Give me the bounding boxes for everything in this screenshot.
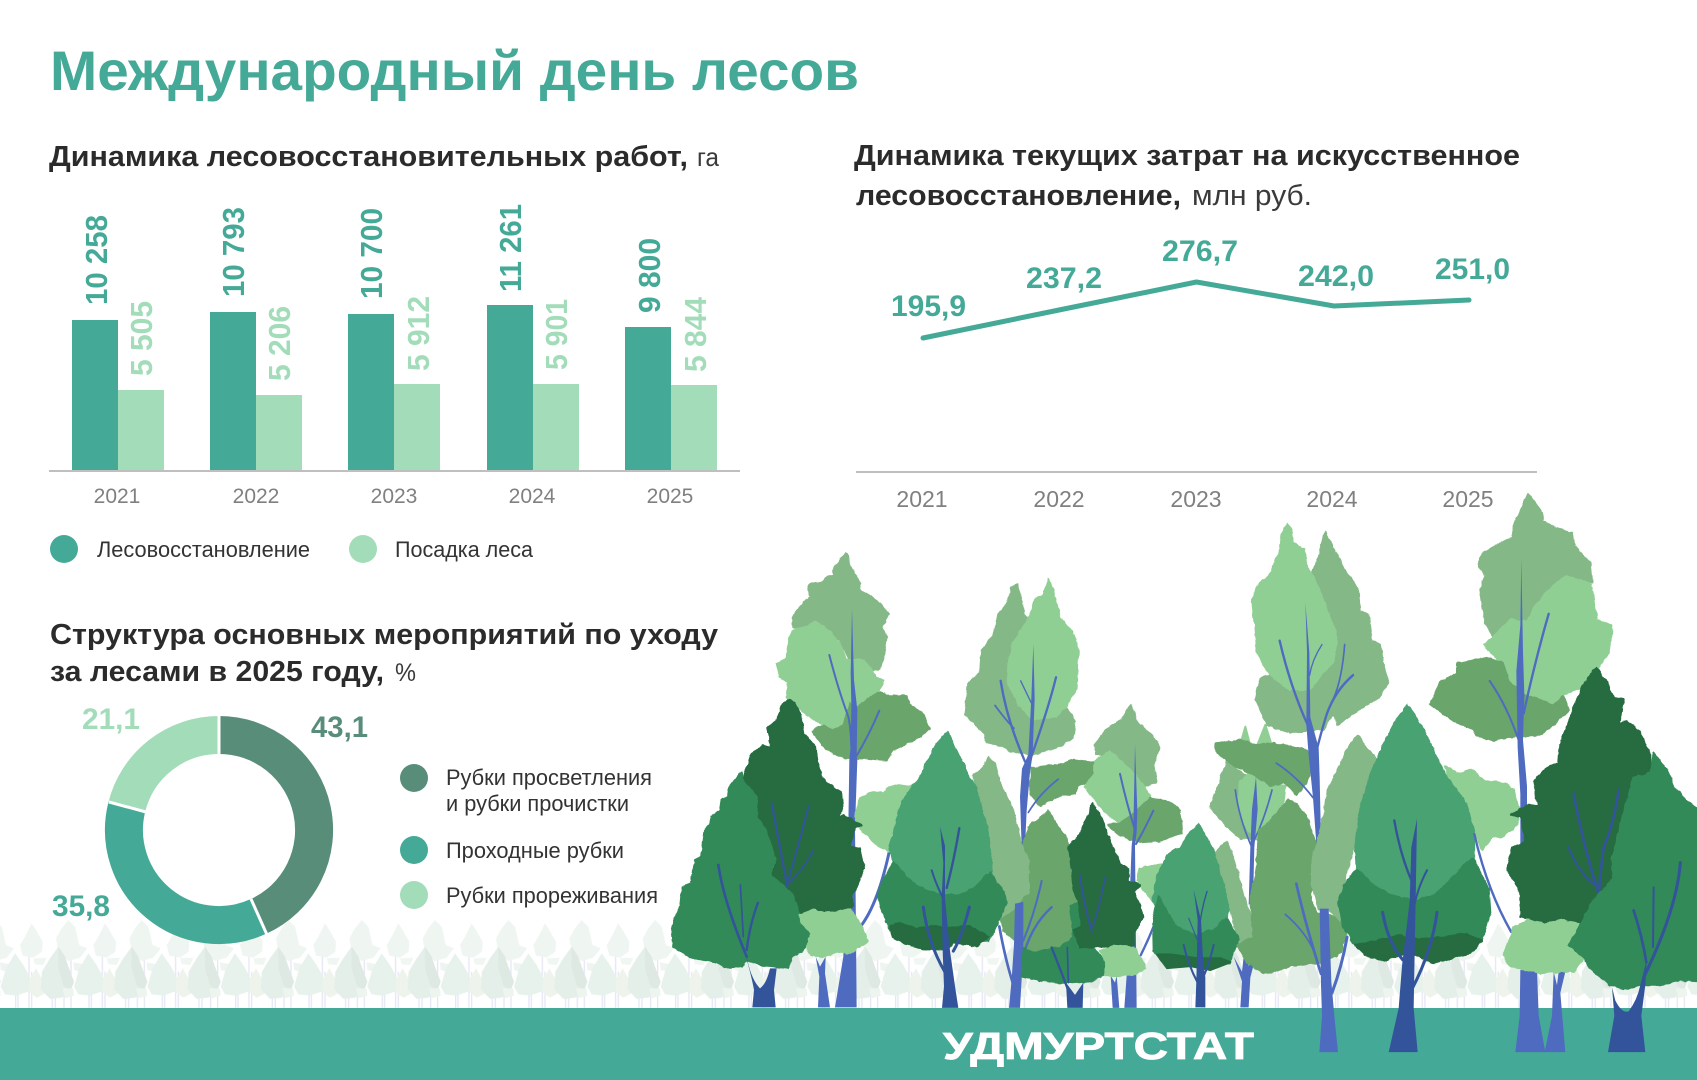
tree: tall birch right bbox=[1430, 493, 1612, 1052]
bar legend bbox=[50, 535, 534, 563]
trunk: centre tree bbox=[999, 881, 1052, 1008]
footer label: УДМУРТСТАТ bbox=[943, 1026, 1254, 1068]
bar values: 10 258 bbox=[79, 215, 114, 305]
bar axis years: 2022 bbox=[233, 485, 279, 508]
line values: 237,2 bbox=[1026, 262, 1102, 295]
leaf: light right bbox=[1445, 767, 1519, 849]
tree: small birch right bbox=[1210, 725, 1310, 1007]
bar legend: Лесовосстановление bbox=[97, 537, 310, 562]
trunk: olive tree bbox=[1285, 884, 1347, 1052]
illustration: left trees bbox=[672, 553, 929, 1007]
bar values: 5 206 bbox=[262, 306, 297, 381]
donut legend bbox=[400, 764, 658, 909]
tree: small dark bbox=[1022, 804, 1145, 1008]
tree: pale crown bbox=[1312, 736, 1379, 920]
line axis years: 2025 bbox=[1442, 486, 1494, 512]
bar axis years: 2023 bbox=[371, 485, 417, 508]
heading: costs: лесовосстановление, bbox=[856, 180, 1181, 212]
heading: structure: за лесами в 2025 году, bbox=[50, 656, 384, 688]
leaf: light crown bbox=[855, 783, 917, 852]
donut values: 21,1 bbox=[82, 703, 140, 736]
bar values: 5 844 bbox=[678, 296, 713, 372]
bar axis years: 2025 bbox=[647, 485, 693, 508]
tree: dark right bbox=[1507, 668, 1650, 924]
bar values: 5 901 bbox=[539, 299, 574, 370]
tree: narrow pale left bbox=[1215, 842, 1254, 945]
panel: reforestation bar chart bbox=[49, 141, 740, 563]
line axis years: 2024 bbox=[1306, 486, 1358, 512]
line values: 276,7 bbox=[1162, 235, 1238, 268]
bar axis years: 2021 bbox=[94, 485, 140, 508]
illustration: right trees bbox=[1153, 493, 1697, 1052]
tree: narrow pale bbox=[973, 758, 1028, 918]
line axis years: 2022 bbox=[1033, 486, 1085, 512]
heading: structure: Структура основных мероприятий по уходу bbox=[50, 619, 718, 651]
bar values: 10 700 bbox=[354, 208, 389, 299]
donut values: 35,8 bbox=[52, 890, 110, 923]
tree: tall birch bbox=[777, 553, 929, 1007]
background forest bbox=[0, 905, 1697, 1008]
bar axis years bbox=[94, 485, 693, 508]
tree: small teal bbox=[1153, 824, 1239, 1007]
bar axis years: 2024 bbox=[509, 485, 556, 508]
line values: 251,0 bbox=[1435, 253, 1510, 286]
donut legend: Рубки прореживания bbox=[446, 883, 658, 908]
line axis years: 2023 bbox=[1170, 486, 1222, 512]
tree: teal centre bbox=[878, 732, 1007, 1008]
panel: donut chart bbox=[50, 619, 718, 937]
illustration: centre trees bbox=[878, 579, 1182, 1008]
heading: reforestation: га bbox=[697, 142, 720, 172]
donut legend: и рубки прочистки bbox=[446, 791, 629, 816]
bar legend: Посадка леса bbox=[395, 537, 534, 562]
heading: costs: Динамика текущих затрат на искусственное bbox=[854, 140, 1520, 172]
footer band bbox=[0, 1008, 1697, 1080]
bar values bbox=[79, 204, 713, 381]
bar values: 9 800 bbox=[632, 238, 667, 313]
line values: 195,9 bbox=[891, 290, 966, 323]
donut bbox=[109, 715, 314, 937]
bar values: 10 793 bbox=[216, 207, 251, 297]
tree: birch centre bbox=[965, 579, 1110, 848]
heading: structure: % bbox=[395, 659, 416, 687]
line values: 242,0 bbox=[1298, 260, 1374, 293]
bar values: 11 261 bbox=[493, 204, 528, 292]
tree: large birch bbox=[1252, 524, 1389, 844]
donut values bbox=[52, 703, 368, 923]
heading: structure bbox=[50, 619, 718, 688]
line values bbox=[891, 235, 1510, 323]
tree: small birch bbox=[1085, 705, 1182, 1008]
tree: teal right bbox=[1339, 706, 1490, 1052]
cost line bbox=[923, 282, 1469, 338]
bars bbox=[49, 305, 740, 472]
panel: cost line chart bbox=[854, 140, 1537, 512]
donut legend: Рубки просветления bbox=[446, 765, 652, 790]
heading: costs: млн руб. bbox=[1192, 180, 1312, 212]
bar values: 5 505 bbox=[124, 301, 159, 376]
tree: mid green right bbox=[1569, 754, 1697, 1052]
bar values: 5 912 bbox=[401, 296, 436, 371]
tree: olive green bbox=[1000, 811, 1085, 953]
leaf: light lower crown bbox=[800, 908, 867, 957]
leaf: light low crown right bbox=[1504, 918, 1584, 974]
tree: mid green bbox=[672, 772, 813, 1007]
tree: olive right bbox=[1237, 800, 1345, 974]
title: Международный день лесов bbox=[50, 39, 859, 102]
donut legend: Проходные рубки bbox=[446, 838, 624, 863]
line axis years bbox=[896, 486, 1494, 512]
tree: dark green bbox=[743, 699, 864, 915]
donut values: 43,1 bbox=[311, 711, 368, 744]
line axis years: 2021 bbox=[896, 486, 948, 512]
heading: costs bbox=[854, 140, 1520, 212]
heading: reforestation: Динамика лесовосстановительных работ, bbox=[49, 141, 688, 173]
